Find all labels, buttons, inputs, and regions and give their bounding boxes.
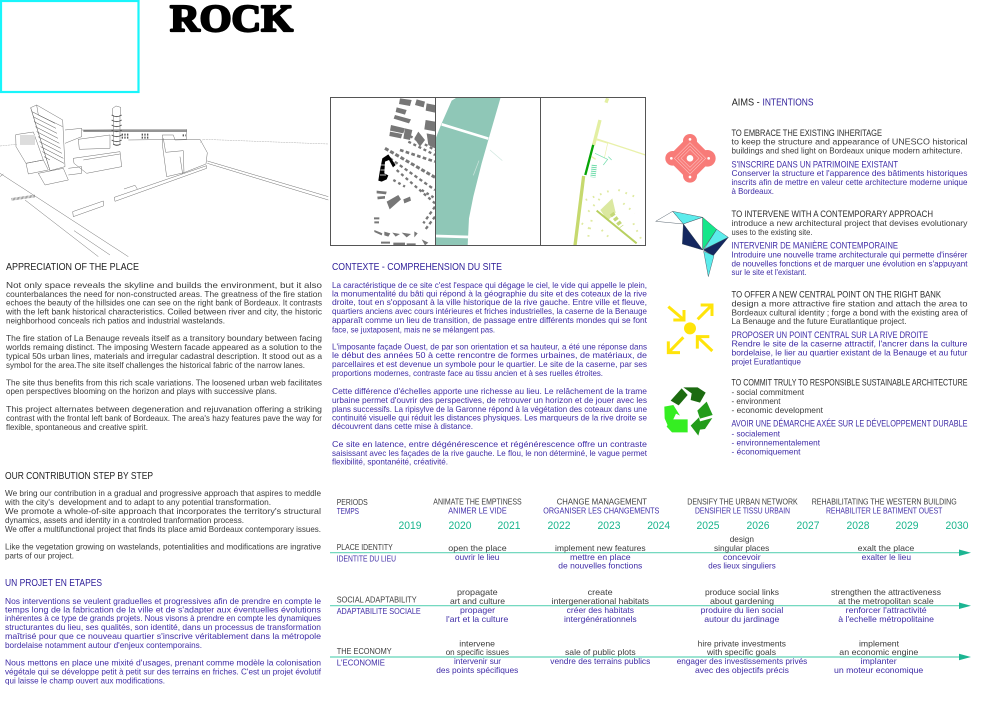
row: social adaptability: autour du jardinage xyxy=(704,614,780,624)
text block: un projet en etapes: temps long de la fabrication de la ville et de s'adapter aux éventuelles évolutions xyxy=(5,604,321,614)
text block: contexte: apparaît comme un lieu de transition, de passage entre différents mondes qui se font xyxy=(332,315,648,325)
periods labels: TEMPS xyxy=(337,506,359,516)
text block: aim 4: - social commitment xyxy=(732,387,805,397)
heading: appreciation of the place: APPRECIATION OF THE PLACE xyxy=(6,262,139,273)
text block: aim 3: TO OFFER A NEW CENTRAL POINT ON THE RIGHT BANK xyxy=(732,290,941,300)
periods labels xyxy=(337,497,957,516)
years axis: 2029 xyxy=(896,520,918,532)
text block: aim 2 xyxy=(732,209,968,277)
row: social adaptability: intergenerational habitats xyxy=(552,596,649,606)
text block: un projet en etapes: Nos interventions se veulent graduelles et progressives afin de prendre en compte le xyxy=(5,596,321,606)
text block: appreciation of the place: contrast with the frontal left bank of Bordeaux. The area's hazy features pave the way for xyxy=(6,413,322,423)
text block: appreciation of the place: The site thus benefits from this rich scale variations. The loosened urban web facilitates xyxy=(6,378,322,388)
heading: contexte: CONTEXTE - COMPREHENSION DU SITE xyxy=(332,262,502,273)
text block: aim 3: Rendre le site de la caserne attractif, l'ancrer dans la culture xyxy=(732,338,968,348)
row: social adaptability xyxy=(337,587,941,624)
row: place identity: mettre en place xyxy=(570,552,631,562)
row: social adaptability: propagate xyxy=(457,587,498,597)
text block: contexte: droite, tout en s'opposant à la ville historique de la rive gauche. Entre ville et fleuve, xyxy=(332,297,647,307)
text block: contexte: L'imposante façade Ouest, de par son orientation et sa hauteur, a été une réponse dans xyxy=(332,342,647,352)
years axis: 2022 xyxy=(548,520,570,532)
heading: aims - intentions: AIMS - xyxy=(732,98,760,108)
text block: aim 2: de nouvelles fonctions et de marquer une évolution en s'appuyant xyxy=(732,258,968,268)
years axis: 2020 xyxy=(448,520,472,532)
row: the economy: intervene xyxy=(459,638,495,648)
text block: un projet en etapes: qui laisse le champ ouvert aux modifications. xyxy=(5,676,165,686)
text block: aim 4: - socialement xyxy=(732,428,781,438)
text block: aim 4: - économiquement xyxy=(732,446,801,456)
text block: contexte: le début des années 50 à cette rencontre de formes urbaines, de matériaux, de xyxy=(332,350,647,360)
text block: aim 1: to keep the structure and appearance of UNESCO historical xyxy=(732,136,968,146)
text block: aim 1: buildings and shed light on Bordeaux unique modern arhitecture. xyxy=(732,146,962,156)
heading: our contribution step by step: OUR CONTRIBUTION STEP BY STEP xyxy=(5,471,153,482)
text block: contexte: Cette différence d'échelles apporte une richesse au lieu. Le relâchement de la trame xyxy=(332,386,647,396)
text block: aim 2: Introduire une nouvelle trame architecturale qui permette d'insérer xyxy=(732,250,968,260)
text block: aim 1 xyxy=(732,128,968,196)
years axis: 2027 xyxy=(796,520,820,532)
text block: un projet en etapes: bordelaise notamment autour d'enjeux contemporains. xyxy=(5,640,202,650)
line drawing of the fire station site xyxy=(0,105,328,257)
row: social adaptability: strengthen the attractiveness xyxy=(831,587,941,597)
text block: contexte: quartiers anciens avec cours intérieures et friches industrielles, la caserne de la Benauge xyxy=(332,306,647,316)
row: place identity: ouvrir le lieu xyxy=(455,552,500,562)
icon: origami bird xyxy=(656,211,728,277)
text block: aim 1: S'INSCRIRE DANS UN PATRIMOINE EXISTANT xyxy=(732,159,898,169)
text block: contexte: parcellaires et est devenue un symbole pour le quartier. Le site de la caserne, par ses xyxy=(332,359,647,369)
heading: un projet en etapes: UN PROJET EN ETAPES xyxy=(5,578,102,589)
text block: appreciation of the place: open perspectives blooming on the horizon and plays with successive plans. xyxy=(6,386,277,396)
text block: appreciation of the place: counterbalances the need for non-constructed areas. The greatness of the fire station xyxy=(6,289,322,299)
text block: aim 4 xyxy=(732,377,968,456)
text block: our contribution: We promote a whole-of-site approach that incorporates the territory's structural xyxy=(5,506,321,516)
icon: green recycling arrows xyxy=(664,387,713,436)
cyan placeholder frame xyxy=(1,1,138,92)
periods labels: PERIODS xyxy=(337,497,368,507)
row: the economy: intervenir sur xyxy=(454,656,501,666)
text block: our contribution: dynamics, assets and identity in a controled tranformation process. xyxy=(5,515,244,525)
row: social adaptability: produire du lien social xyxy=(701,605,783,615)
text block: appreciation of the place: The fire station of La Benauge reveals itself as a transitory boundary between facing xyxy=(6,333,322,343)
text block: contexte: saisissant avec les façades de la rive gauche. Le flou, le non déterminé, le vague permet xyxy=(332,448,648,458)
text block: aim 2: sur le site et l'existant. xyxy=(732,267,806,277)
row: the economy: vendre des terrains publics xyxy=(550,656,650,666)
text block: aim 3 xyxy=(732,290,968,366)
row: place identity: open the place xyxy=(448,543,507,553)
text block: un projet en etapes: inhérentes à ce type de grands projets. Nous visons à prendre en compte les dynamiques xyxy=(5,613,321,623)
text block: appreciation of the place: neighborhood conceals rich patios and industrial wastelands. xyxy=(6,316,225,326)
years axis xyxy=(398,520,968,532)
periods labels: CHANGE MANAGEMENT xyxy=(557,497,647,507)
map: river Garonne xyxy=(436,97,502,246)
row: the economy: with specific goals xyxy=(706,647,776,657)
text block: aim 3: PROPOSER UN POINT CENTRAL SUR LA RIVE DROITE xyxy=(732,330,928,340)
text block: contexte: Ce site en latence, entre dégénérescence et régénérescence offre un contraste xyxy=(332,439,647,449)
text block: aim 1: Conserver la structure et l'apparence des bâtiments historiques xyxy=(732,168,968,178)
text block: our contribution: Like the vegetation growing on wastelands, potentialities and modifications are ingrative xyxy=(5,542,321,552)
row: the economy xyxy=(337,638,924,675)
text block: our contribution xyxy=(4,488,321,560)
text block: our contribution: We bring our contribution in a gradual and progressive approach that aspires to meddle xyxy=(5,488,321,498)
row: the economy: des points spécifiques xyxy=(436,665,518,675)
text block: aim 1: TO EMBRACE THE EXISTING INHERITAGE xyxy=(732,128,882,138)
row: the economy: sale of public plots xyxy=(565,647,636,657)
text block: aim 3: projet Euratlantique xyxy=(732,356,801,366)
row: social adaptability: produce social links xyxy=(705,587,779,597)
row: the economy: engager des investissements privés xyxy=(677,656,807,666)
periods labels: ORGANISER LES CHANGEMENTS xyxy=(543,505,660,515)
row: place identity: exalter le lieu xyxy=(862,552,911,562)
row: place identity: concevoir xyxy=(723,552,761,562)
text block: aim 4: - economic development xyxy=(732,405,824,415)
icon: red diamond xyxy=(665,134,716,183)
periods labels: REHABILITATING THE WESTERN BUILDING xyxy=(812,497,957,507)
text block: our contribution: with the city's development and to adapt to any potential transformation. xyxy=(4,497,271,507)
row: social adaptability: à l'echelle métropolitaine xyxy=(838,614,934,624)
row: place identity: IDENTITE DU LIEU xyxy=(337,554,396,564)
years axis: 2025 xyxy=(696,520,720,532)
periods labels: ANIMATE THE EMPTINESS xyxy=(433,497,522,507)
row: place identity: des lieux singuliers xyxy=(708,560,776,570)
row: place identity: singular places xyxy=(714,543,769,553)
text block: contexte: face, se juxtaposent, mais ne se mélangent pas. xyxy=(332,324,495,334)
heading: aims - intentions xyxy=(732,98,814,108)
text block: aim 4: - environment xyxy=(732,396,781,406)
text block: contexte: urbaine permet d'ouvrir des perspectives, de retrouver un horizon et de jouer avec les xyxy=(332,395,647,405)
text block: aim 1: inscrits afin de mettre en valeur cette architecture moderne unique xyxy=(732,177,968,187)
text block: appreciation of the place xyxy=(5,280,322,432)
text block: contexte: plans successifs. La ripisylve de la Garonne répond à la végétation des coteaux dans une xyxy=(332,404,647,414)
years axis: 2024 xyxy=(647,520,670,532)
row: social adaptability: l'art et la culture xyxy=(446,614,509,624)
text block: appreciation of the place: flexible, spontaneous and creative spirit. xyxy=(6,422,148,432)
text block: un projet en etapes: Nous mettons en place une mixité d'usages, prenant comme modèle la colonisation xyxy=(5,658,321,668)
text block: aim 1: à Bordeaux. xyxy=(732,186,774,196)
heading: aims - intentions: INTENTIONS xyxy=(762,98,814,108)
text block: contexte: continuité visuelle qui réduit les distances physiques. Les marqueurs de la rive droite se xyxy=(332,412,647,422)
years axis: 2021 xyxy=(498,520,520,532)
periods labels: REHABILITER LE BATIMENT OUEST xyxy=(826,505,942,515)
row: the economy: L'ECONOMIE xyxy=(337,657,385,667)
text block: un projet en etapes xyxy=(5,596,322,686)
text block: un projet en etapes: végétale qui se développe petit à petit sur des terrains en friches. C'est un projet évolutif xyxy=(5,666,322,676)
row: social adaptability: créer des habitats xyxy=(567,605,634,615)
row: social adaptability: propager xyxy=(460,605,495,615)
text block: our contribution: parts of our project. xyxy=(5,550,74,560)
row: the economy: hire private investments xyxy=(698,638,786,648)
text block: un projet en etapes: maîtrisé pour que ce nouveau quartier s'inscrive véritablement dans la métropole xyxy=(5,631,321,641)
row: the economy: THE ECONOMY xyxy=(337,646,392,656)
periods labels: DENSIFIER LE TISSU URBAIN xyxy=(695,505,790,515)
row: place identity: implement new features xyxy=(555,543,646,553)
text block: appreciation of the place: worlds remaing distinct. The imposing Western facade appeared as a solution to the xyxy=(5,342,322,352)
text block: aim 2: introduce a new architectural project that devises evolutionary xyxy=(732,218,968,228)
text block: aim 2: INTERVENIR DE MANIÈRE CONTEMPORAINE xyxy=(732,241,898,251)
row: place identity: design xyxy=(730,534,754,544)
text block: appreciation of the place: This project alternates between degeneration and rejuvanation offering a striking xyxy=(6,404,322,414)
row: the economy: on specific issues xyxy=(446,647,509,657)
text block: aim 3: Bordeaux cultural identity ; forge a bond with the existing area of xyxy=(732,308,968,318)
text block: contexte: proportions modernes, contraste face au tissu ancien et à ses ruelles étroites. xyxy=(332,368,603,378)
years axis: 2030 xyxy=(946,520,968,532)
periods labels: DENSIFY THE URBAN NETWORK xyxy=(687,497,798,507)
row: the economy: implanter xyxy=(861,656,897,666)
row: the economy: an economic engine xyxy=(839,647,919,657)
years axis: 2023 xyxy=(598,520,620,532)
row: place identity: de nouvelles fonctions xyxy=(558,560,642,570)
text block: aim 4: - environnementalement xyxy=(732,438,821,448)
periods labels: ANIMER LE VIDE xyxy=(448,505,507,515)
text block: appreciation of the place: symbol for the area.The site itself challenges the historical fabric of the narrow lanes. xyxy=(6,360,305,370)
row: social adaptability: renforcer l'attractivité xyxy=(846,605,927,615)
text block: aim 2: TO INTERVENE WITH A CONTEMPORARY APPROACH xyxy=(732,209,933,219)
row: place identity: exalt the place xyxy=(858,543,915,553)
years axis: 2019 xyxy=(398,520,422,532)
row: the economy: un moteur economique xyxy=(834,665,924,675)
text block: appreciation of the place: with the left bank historical characteristics. Coiled between river and city, the historic xyxy=(5,306,322,316)
text block: aim 3: design a more attractive fire station and attach the area to xyxy=(732,298,968,308)
text block: appreciation of the place: echoes the beauty of the hillsides one can see on the right bank of Bordeaux. It contrasts xyxy=(6,298,322,308)
row: social adaptability: about gardening xyxy=(710,596,774,606)
text block: contexte: la monumentalité du bâti qui répond à la géographie du site et des coteaux de la rive xyxy=(332,288,647,298)
row: social adaptability: ADAPTABILITE SOCIALE xyxy=(337,606,421,616)
icon: converging yellow arrows xyxy=(668,305,712,353)
site maps triptych xyxy=(330,97,646,246)
row: place identity xyxy=(337,534,915,570)
row: social adaptability: intergénérationnels xyxy=(564,614,637,624)
text block: appreciation of the place: typical 50s urban lines, materials and irregular cadastral description. It stood out as a xyxy=(6,351,322,361)
row axes with arrowheads xyxy=(330,550,971,660)
text block: contexte: découvrent dans cette mise à distance. xyxy=(332,421,473,431)
row: place identity: PLACE IDENTITY xyxy=(337,542,393,552)
timeline chart xyxy=(330,497,971,675)
row: social adaptability: create xyxy=(588,587,613,597)
row: social adaptability: at the metropolitan scale xyxy=(838,596,934,606)
text block: aim 2: uses to the existing site. xyxy=(732,227,812,237)
text block: aim 3: La Benauge and the future Euratlantique project. xyxy=(732,316,906,326)
row: the economy: implement xyxy=(859,638,900,648)
map: green network xyxy=(575,98,646,246)
text block: un projet en etapes: structurantes du lieu, ses qualités, son identité, dans un processus de transformation xyxy=(5,622,321,632)
row: social adaptability: art and culture xyxy=(450,596,505,606)
map: built fabric xyxy=(374,98,435,245)
text block: appreciation of the place: Not only space reveals the skyline and builds the environment, but it also xyxy=(6,280,322,290)
text block: contexte: La caractéristique de ce site c'est l'espace qui dégage le ciel, le vide qui appelle le plein, xyxy=(332,280,647,290)
text block: our contribution: We offer a multifunctional project that finds its place amid Bordeaux contemporary issues. xyxy=(5,524,321,534)
row: social adaptability: SOCIAL ADAPTABILITY xyxy=(337,594,417,604)
years axis: 2026 xyxy=(746,520,770,532)
text block: aim 3: bordelaise, le lier au quartier existant de la Benauge et au futur xyxy=(732,348,968,358)
row: the economy: avec des objectifs précis xyxy=(695,665,789,675)
text block: contexte: flexibilité, spontanéité, créativité. xyxy=(332,456,448,466)
years axis: 2028 xyxy=(846,520,870,532)
text block: contexte xyxy=(332,280,648,466)
